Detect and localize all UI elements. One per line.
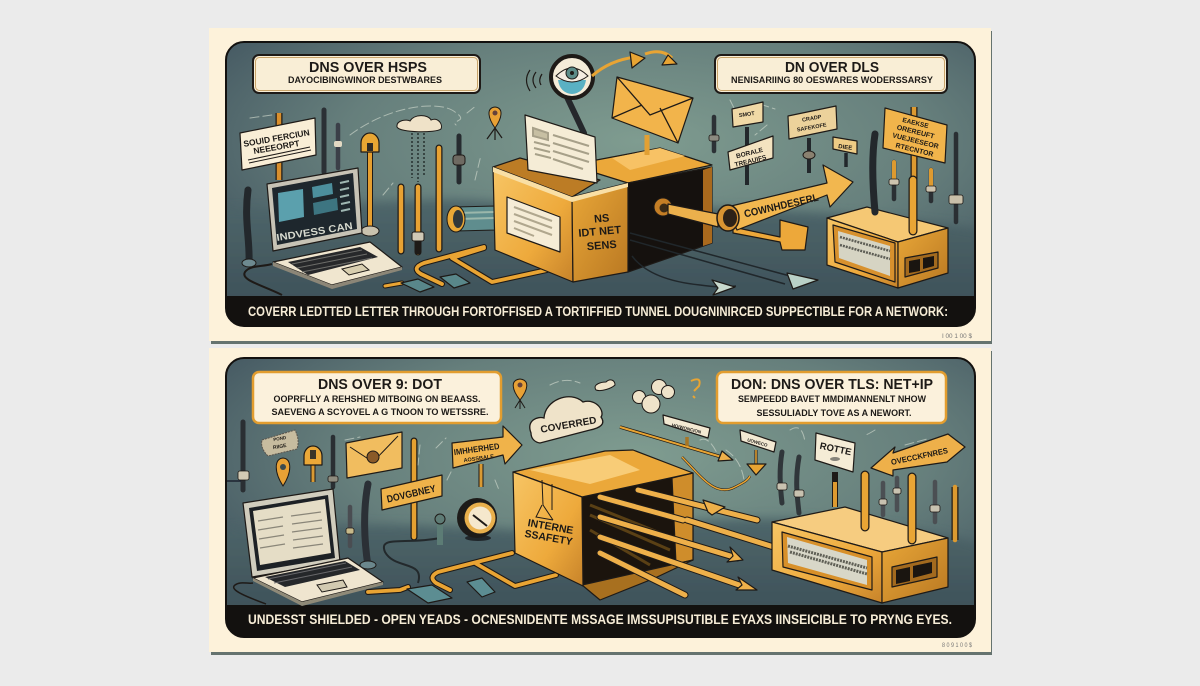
reference number: top: I 00 1 00 $ [942,333,972,340]
sign: Rotte [815,433,855,507]
sign: Souid Fercun: NEEEORPT [253,138,301,156]
sign: Souid Fercun [240,113,316,180]
orange wire frame [385,247,547,286]
small cards: bottom [407,578,495,603]
sign: Hoiwoncion: HOIWONCION [671,422,702,435]
arrow sign: Imhherhed: IMHHERHED [453,441,500,457]
sign: Cradp: SAFEKOFE [797,122,827,134]
laptop [267,168,402,289]
tunnel pipe [654,198,718,227]
sign: Uowedo with down arrow [740,430,776,475]
sign: Hoiwoncion [663,415,710,446]
black arrows [630,233,818,295]
icon: envelope small [346,432,402,478]
sign: orange notice: VUEJEESEOR [891,132,939,151]
icon: gauge [457,498,497,541]
heading: DNS over HSPS: DAYOCIBINGWINOR DESTWBARES [288,75,442,86]
box: internet safety [513,450,693,600]
cable and stand [384,514,445,583]
laptop: INDVESS CAN [276,221,353,244]
heading: DN over DLS: DN OVER DLS [785,60,879,76]
illustration background: top [216,42,985,326]
box text: SENS [586,239,617,253]
icon: padlock on post [361,133,379,236]
arrow sign: Ovecckfnres [871,434,965,476]
sign: Borale [728,136,773,170]
heading: DNS over HSPS: DNS OVER HSPS [309,60,427,76]
pole and sign: Dovgeney [381,441,442,537]
sign: orange notice: OREREUFT [896,124,936,141]
heading: DNS over 9: DoT: OOPRFLLY A REHSHED MITBOING ON BEAASS. [274,394,480,405]
box label [507,197,560,252]
card: bottom [209,348,992,655]
sign: Cradp [788,106,837,139]
orange poles [401,148,439,254]
sign: Pond Riige: RIIGE [273,443,288,451]
panel: DNS over TLS [209,348,992,655]
slider and small signs [709,102,857,185]
sign: Diee [833,137,857,154]
cable [244,264,282,295]
sign: Uowedo with down arrow: UOWECO [747,437,769,448]
laptop: bottom [234,489,383,606]
sign: orange notice [883,108,947,163]
icon: lock [304,446,322,482]
box text [578,212,622,253]
tunnel tube entry [447,206,495,232]
motion strokes: bottom [345,380,927,490]
paper leaving box [525,115,597,183]
reference number: bottom: 8 0 9 1 0 0 $ [942,642,972,649]
sign: Rotte: ROTTE [819,441,852,458]
icon: pin [276,458,290,486]
slider: centre [453,136,465,182]
arrows: leaving box [600,490,777,595]
arrow: letter path from magnifier [592,52,677,76]
motion strokes [250,100,775,195]
connectors [777,452,804,513]
illustration background: bottom [216,358,985,637]
sign: Diee: DIEE [838,144,852,152]
sign: Souid Fercun: SOUID FERCIUN [243,127,310,149]
sign: Pond Riige [262,430,298,456]
arrow: Counihdeserl tunnel: COWNHDESERL [743,192,820,220]
sign: orange notice: EAEKSE [902,117,930,130]
card: top [209,28,992,344]
box: open envelope box [493,115,712,282]
slider: far left [227,422,249,490]
box text: internet safety: INTERNE [527,517,574,537]
sign: Borale: BORALE [735,147,764,160]
icon: location pin [487,107,502,140]
orange wire frame: bottom [368,553,556,592]
sign: Pond Riige: POND [273,435,287,442]
small clouds [595,379,700,413]
heading: DNS over 9: DoT: SAEVENG A SCYOVEL A G TNOON TO WETSSRE. [272,407,488,418]
heading: DoN: DNS over TLS [717,372,946,423]
antenna and slider [346,484,376,569]
antenna and slider: left [242,110,342,267]
panel: DNS over HTTPS [209,28,992,344]
pole and sign: Dovgeney: DOVGBNEY [386,484,437,506]
heading: DNS over 9: DoT: DNS OVER 9: DOT [318,377,442,393]
cloud: Coverred: COVERRED [540,415,597,436]
sign: Smot: SMOT [739,111,756,119]
small cards on ground [401,274,470,292]
router and antennas: bottom [772,475,955,603]
icon: magnifier with eye [526,56,593,133]
sign: Smot [732,102,763,127]
heading: DoN: DNS over TLS: SESSULIADLY TOVE AS A NEWORT. [756,408,912,419]
caption: top: COVERR LEDTTED LETTER THROUGH FORTOFFISED A TORTIFFIED TUNNEL DOUGNINIRCED SUPPECTIBLE FOR A NETWORK: [248,304,948,319]
icon: pin top [513,379,527,409]
sign: Cradp: CRADP [802,114,822,124]
heading: DoN: DNS over TLS: DON: DNS OVER TLS: NET+IP [731,377,933,393]
box text: IDT NET [578,224,622,240]
heading: DN over DLS [715,55,947,93]
box text: NS [594,212,610,226]
caption: bottom: UNDESST SHIELDED - OPEN YEADS - OCNESNIDENTE MSSAGE IMSSUPISUTIBLE EYAXS IINSEICIBLE TO PRYNG EYES. [248,612,952,627]
arrow sign: Imhherhed [452,426,522,487]
heading: DoN: DNS over TLS: SEMPEEDD BAVET MMDIMANNENLT NHOW [738,394,926,405]
heading: DNS over 9: DoT [253,372,501,423]
slider: beside lock [328,437,338,487]
sign: orange notice: RTECNTOR [895,142,934,159]
arrow: Counihdeserl tunnel [717,165,853,250]
box text: internet safety: SSAFETY [524,528,573,548]
icon: cloud with data drip [397,116,441,182]
arrow: thin top [620,427,750,490]
box text: internet safety [524,517,574,548]
arrow sign: Imhherhed: AOSSBALE [463,454,495,464]
cloud: Coverred [530,397,603,443]
router and antennas [827,107,963,288]
arrow sign: Ovecckfnres: OVECCKFNRES [890,446,949,467]
heading: DNS over HSPS [253,55,480,93]
icon: envelope [612,77,693,155]
sign: Borale: TREAUIFS [734,154,768,169]
heading: DN over DLS: NENISARIING 80 OESWARES WODERSSARSY [731,75,934,86]
